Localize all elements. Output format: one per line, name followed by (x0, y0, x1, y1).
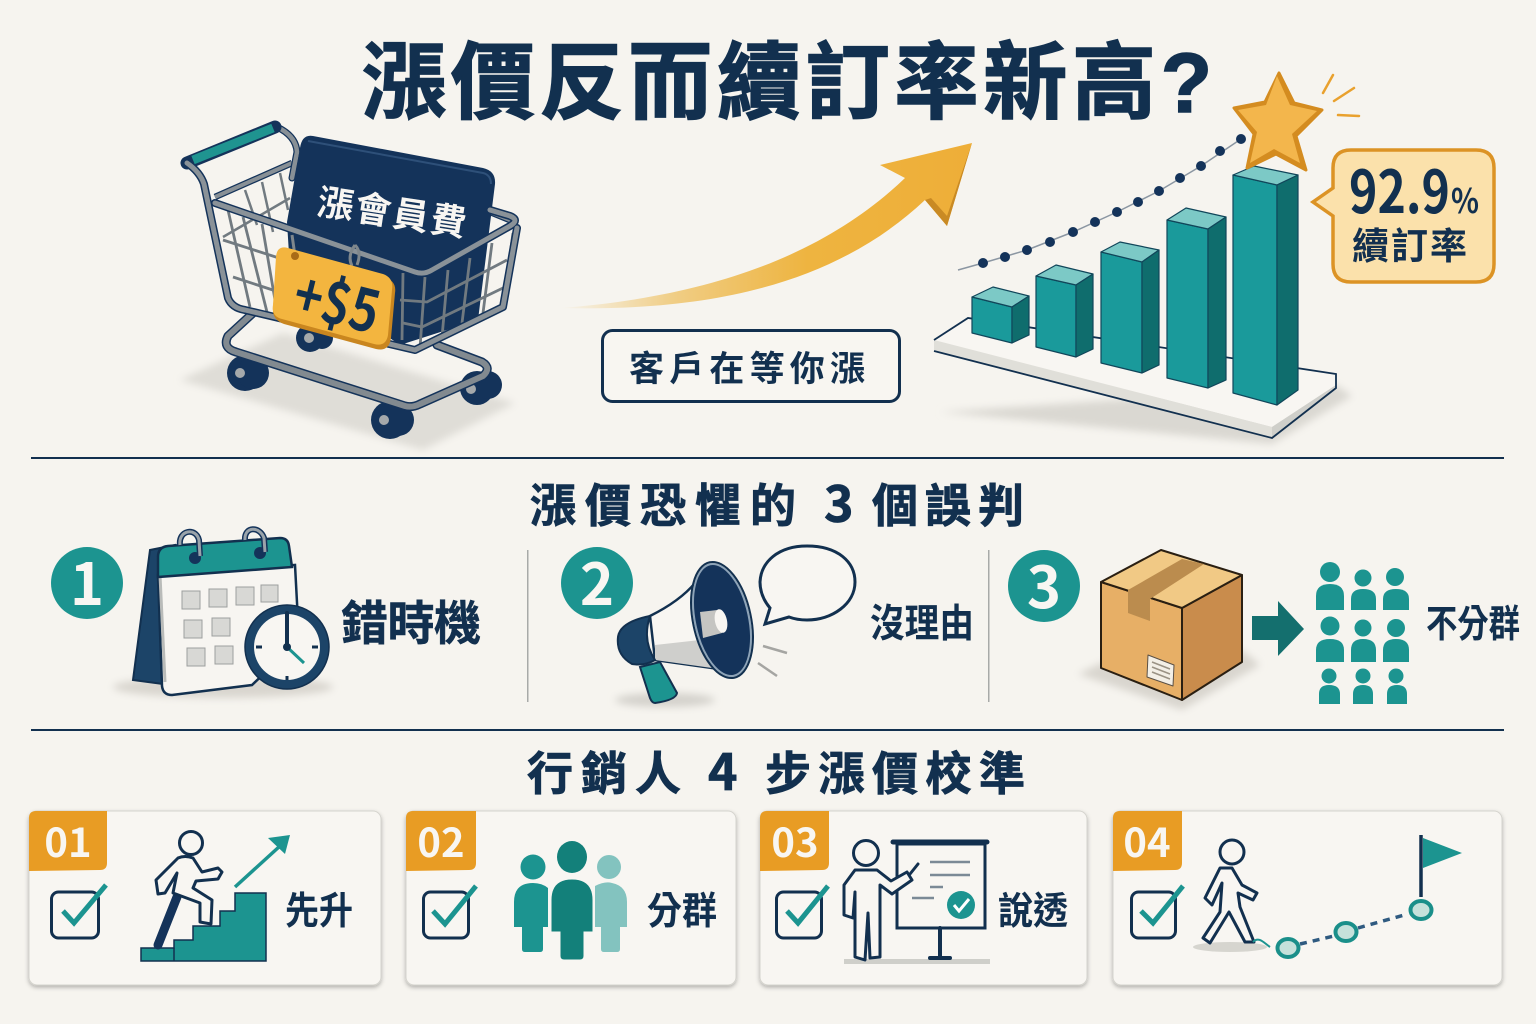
icon: calendar and clock (113, 529, 333, 698)
section heading: three misjudgments: 個誤判 (872, 480, 1031, 532)
section heading: three misjudgments: 漲價恐懼的 (530, 480, 805, 532)
divider (31, 729, 1504, 731)
label: customers waiting: 客戶在等你漲 (629, 350, 865, 389)
icon: group of people (1316, 562, 1409, 704)
section heading: four steps: 4 (708, 733, 738, 805)
section heading: three misjudgments: 3 (824, 465, 854, 537)
illustration: shopping cart with price tag (180, 127, 517, 450)
arrow (1252, 601, 1304, 656)
label: 錯時機 (341, 597, 481, 650)
dotted trend line (958, 134, 1246, 270)
number badge 3 (1008, 541, 1080, 625)
step card 02 (406, 811, 736, 985)
misjudgment 3: no segmentation (1008, 541, 1520, 710)
number tab: 02 (417, 811, 465, 869)
chart base platform (934, 318, 1352, 444)
step card 01 (29, 811, 381, 985)
bars (972, 166, 1298, 405)
number tab (29, 811, 107, 871)
label: customers waiting (602, 330, 900, 402)
label: 說透 (998, 891, 1068, 933)
number badge 1 (51, 538, 123, 622)
step card 04 (1113, 811, 1502, 985)
label: 先升 (285, 891, 353, 933)
icon: person climbing stairs (141, 832, 290, 961)
icon: checkbox (52, 885, 106, 938)
callout: 92.9% renewal rate: % (1451, 174, 1479, 223)
price tag: +$5 (286, 248, 390, 350)
misjudgment 2: no reason (561, 538, 974, 707)
icon: cardboard box (1078, 550, 1260, 710)
icon: checkbox (424, 886, 476, 938)
callout: 92.9% renewal rate (1313, 145, 1494, 282)
number badge 3: 3 (1027, 541, 1061, 625)
membership fee card: 漲會員費 (315, 181, 469, 244)
label: 沒理由 (870, 603, 974, 646)
number tab: 04 (1123, 811, 1171, 869)
icon: star (1234, 73, 1359, 170)
callout: 92.9% renewal rate: 92.9 (1349, 145, 1450, 230)
vertical divider (527, 550, 528, 702)
divider (31, 457, 1504, 459)
number badge 2: 2 (580, 538, 614, 622)
icon: walking person on path to flag (1193, 835, 1462, 957)
section heading: four steps: 行銷人 (527, 748, 689, 800)
number tab (760, 811, 829, 871)
title: 漲價反而續訂率新高? (362, 36, 1212, 130)
icon: three people (514, 841, 627, 960)
basket rim and frame (187, 163, 517, 350)
number tab (1113, 811, 1182, 871)
membership fee card (287, 136, 495, 345)
growth arrow (560, 143, 972, 308)
front wires (223, 210, 513, 348)
number badge 2 (561, 538, 633, 622)
icon: checkbox (1132, 886, 1183, 938)
lower frame (226, 313, 487, 407)
misjudgment 1: wrong timing (51, 529, 481, 698)
label: 分群 (647, 891, 717, 933)
vertical divider (988, 550, 990, 702)
step card 03 (760, 811, 1087, 985)
callout: 92.9% renewal rate: 續訂率 (1352, 226, 1467, 267)
section heading: four steps: 步漲價校準 (765, 748, 1032, 800)
handle (187, 127, 297, 178)
number tab: 01 (44, 811, 92, 869)
icon: presenter with board (844, 840, 990, 964)
bar chart with star (934, 73, 1494, 444)
icon: checkbox (776, 886, 828, 938)
back wires (215, 163, 517, 237)
icon: megaphone with speech bubble (615, 546, 855, 707)
wheels (227, 324, 502, 439)
number tab (406, 811, 476, 871)
number badge 1: 1 (70, 538, 104, 622)
number tab: 03 (771, 811, 819, 869)
